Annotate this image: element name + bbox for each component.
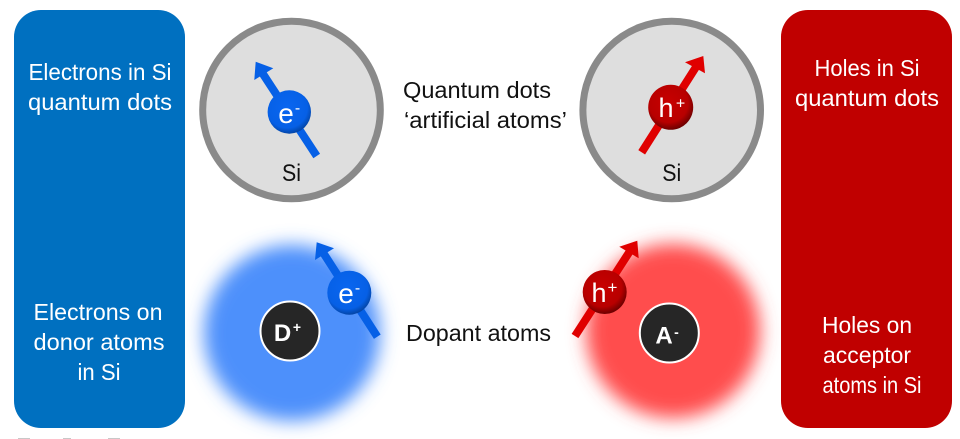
- heading: electrons in Si quantum dots: Electrons in Si: [28, 59, 172, 85]
- glow: acceptor hole cloud: [586, 244, 760, 418]
- text: dopant atoms: Dopant atoms: [406, 320, 551, 346]
- icon: A- ion: -: [674, 324, 679, 340]
- icon: electron: -: [355, 280, 360, 297]
- icon: electron: [268, 90, 311, 134]
- heading: atoms in Si line: atoms in Si: [822, 372, 922, 398]
- panel: electrons: [14, 10, 185, 428]
- arrow: electron spin: [254, 62, 317, 156]
- cropped text remnants at bottom edge: [18, 438, 120, 439]
- icon: hole: +: [676, 96, 685, 112]
- arrow: acceptor hole spin: [575, 241, 639, 336]
- text: quantum dots artificial atoms: Quantum dots: [403, 77, 551, 103]
- heading: electrons quantum dots second line: quantum dots: [28, 89, 172, 115]
- icon: electron: -: [295, 100, 300, 117]
- icon: electron: [327, 271, 371, 315]
- arrow: donor electron spin: [315, 242, 377, 337]
- heading: donor atoms line: donor atoms: [34, 329, 164, 355]
- icon: D+ ion: D: [274, 320, 291, 347]
- label: Si: Si: [282, 160, 301, 187]
- icon: A- ion: [640, 304, 699, 362]
- icon: D+ ion: +: [293, 319, 301, 335]
- icon: electron: e: [278, 98, 294, 129]
- icon: electron: e: [338, 278, 354, 309]
- label: Si: Si: [662, 160, 681, 187]
- icon: A- ion: A: [655, 322, 673, 350]
- dopant: acceptor atom with hole: [575, 241, 760, 418]
- icon: hole: [648, 85, 693, 130]
- icon: hole: +: [608, 278, 618, 297]
- heading: in Si line: in Si: [78, 359, 120, 385]
- glow: donor electron cloud: [204, 245, 380, 421]
- text: quantum dots artificial atoms: [403, 77, 567, 133]
- heading: electrons on donor atoms: Electrons on: [34, 299, 162, 325]
- heading: holes in Si quantum dots: Holes in Si: [814, 55, 920, 81]
- icon: hole: h: [658, 93, 674, 123]
- heading: acceptor line: acceptor: [823, 342, 911, 368]
- quantum dot: hole in Si: [583, 21, 760, 199]
- arrow: hole spin: [642, 56, 705, 152]
- icon: hole: h: [591, 278, 607, 308]
- panel: holes: [781, 10, 952, 428]
- heading: holes quantum dots second line: quantum dots: [795, 85, 939, 111]
- dopant: donor atom with electron: [204, 242, 380, 421]
- text: quantum dots artificial atoms: ‘artificial atoms’: [404, 107, 567, 133]
- icon: D+ ion: [260, 302, 320, 360]
- heading: holes on acceptor atoms: Holes on: [822, 312, 912, 338]
- icon: hole: [583, 270, 627, 314]
- quantum dot: electron in Si: [203, 21, 380, 199]
